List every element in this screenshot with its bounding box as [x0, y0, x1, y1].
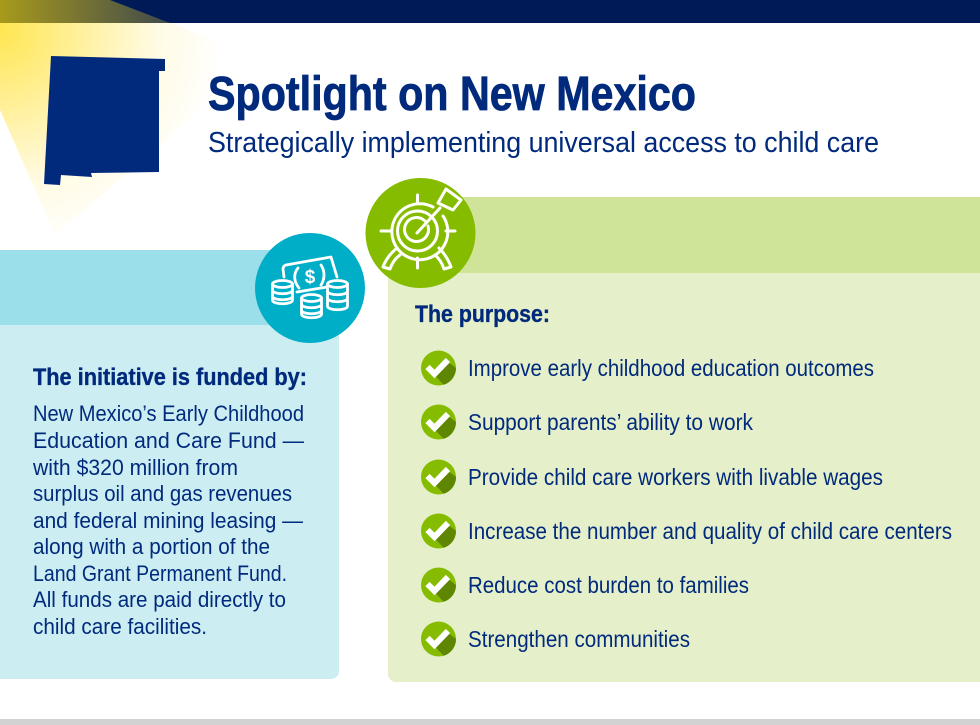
icon: target with arrow [366, 178, 476, 288]
list item: communities: Strengthen communities [468, 626, 690, 652]
text block: funding description: along with a portion of the [33, 534, 270, 559]
list item: outcomes [421, 350, 874, 386]
list item: outcomes: Improve early childhood education outcomes [468, 355, 874, 381]
panel header: funding [0, 250, 339, 326]
text block: funding description: Land Grant Permanent Fund. [33, 561, 287, 586]
text block: funding description: Education and Care Fund — [33, 428, 304, 453]
list item: parents [421, 404, 753, 440]
list item: cost [421, 568, 749, 602]
spotlight beam [0, 23, 260, 235]
text block: funding description: child care facilities. [33, 614, 207, 639]
title: Spotlight on New Mexico [208, 68, 696, 121]
heading: purpose: The purpose: [415, 301, 550, 328]
text block: funding description: with $320 million from [32, 455, 238, 480]
panel: purpose [388, 197, 980, 682]
list item: communities [421, 622, 690, 656]
subtitle: Strategically implementing universal access to child care [208, 127, 879, 159]
text block: funding description: surplus oil and gas revenues [33, 481, 292, 506]
icon: New Mexico state shape [44, 56, 165, 185]
panel body: funding [0, 325, 339, 679]
top bar [0, 0, 980, 23]
text block: funding description: and federal mining leasing — [33, 508, 303, 533]
list item: cost: Reduce cost burden to families [468, 572, 749, 598]
footer bar [0, 719, 980, 725]
heading: funded by: The initiative is funded by: [33, 364, 307, 391]
panel header: purpose [388, 197, 980, 273]
text block: funding description: New Mexico’s Early Childhood [33, 401, 304, 426]
list item: parents: Support parents’ ability to work [468, 409, 753, 435]
list item: centers [421, 514, 952, 548]
icon: money and coins [255, 233, 365, 343]
panel: funding [0, 250, 339, 679]
list item: wages [421, 460, 883, 494]
panel body: purpose [388, 273, 980, 682]
text block: funding description [32, 401, 304, 639]
list item: wages: Provide child care workers with livable wages [468, 464, 883, 490]
text block: funding description: All funds are paid directly to [33, 587, 286, 612]
dollar sign: $ [305, 267, 316, 288]
